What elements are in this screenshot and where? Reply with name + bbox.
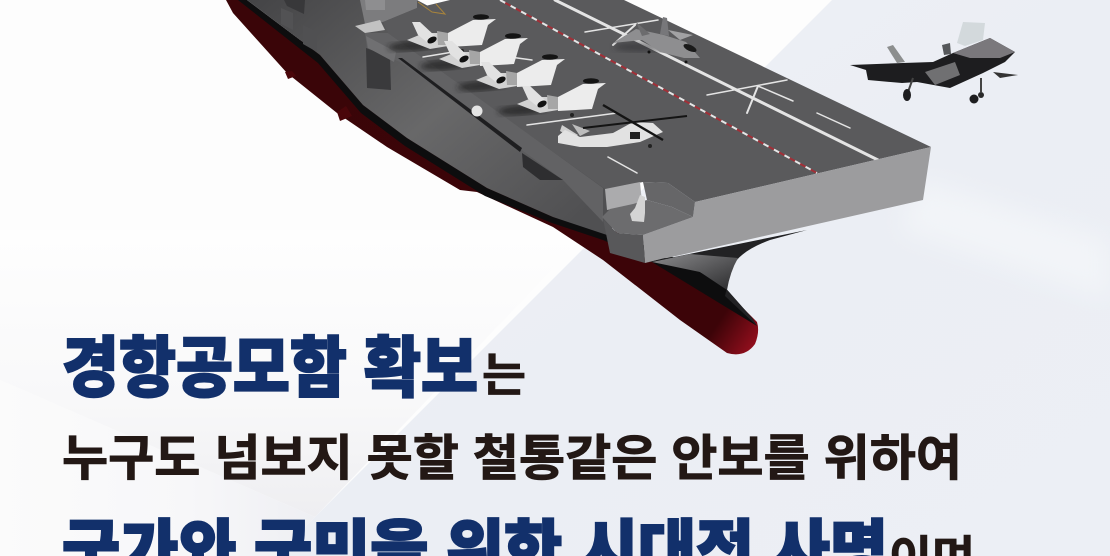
helicopter xyxy=(558,105,687,148)
hull side darker panels xyxy=(281,0,317,52)
background: light crease right xyxy=(900,180,1110,300)
jet 2 xyxy=(420,33,528,72)
island base at top xyxy=(360,0,417,24)
flying F-35 jet xyxy=(850,22,1018,104)
black boot-top band xyxy=(238,0,757,326)
hull vent box xyxy=(366,48,391,90)
line 2: 누구도 넘보지 못할 철통같은 안보를 위하여 xyxy=(62,432,962,486)
upper hull strip below deck edge xyxy=(365,33,603,222)
jet fighters parked on deck xyxy=(388,14,606,117)
background: silk fold below crease xyxy=(0,380,315,556)
hull fittings xyxy=(285,71,352,121)
jet parked on far deck xyxy=(613,17,700,64)
jet 3 xyxy=(457,54,565,93)
flight deck xyxy=(383,0,931,202)
line 1: 는 xyxy=(482,349,526,401)
front deck side face xyxy=(643,147,931,263)
catwalk dark strip xyxy=(398,58,522,152)
headline text xyxy=(62,331,975,556)
sponson side xyxy=(603,219,645,263)
line 1: 경항공모함 확보 xyxy=(62,331,478,405)
port centre line red/white dashes xyxy=(500,0,817,173)
jet 1 xyxy=(388,14,496,53)
aircraft carrier xyxy=(226,0,931,354)
notch walls xyxy=(605,182,642,210)
red lower hull xyxy=(226,0,758,354)
sensor dome xyxy=(472,106,482,116)
jet 4 xyxy=(498,78,606,117)
deck markings xyxy=(423,0,878,173)
background: silk fold above crease xyxy=(0,230,590,517)
underside flare and bow stem xyxy=(645,230,807,326)
gun mount xyxy=(630,195,645,222)
background: pale blue diagonal panel xyxy=(276,0,1110,556)
sponson top xyxy=(602,200,693,235)
grey hull side xyxy=(247,0,640,236)
deck orange outline markings xyxy=(418,2,445,14)
